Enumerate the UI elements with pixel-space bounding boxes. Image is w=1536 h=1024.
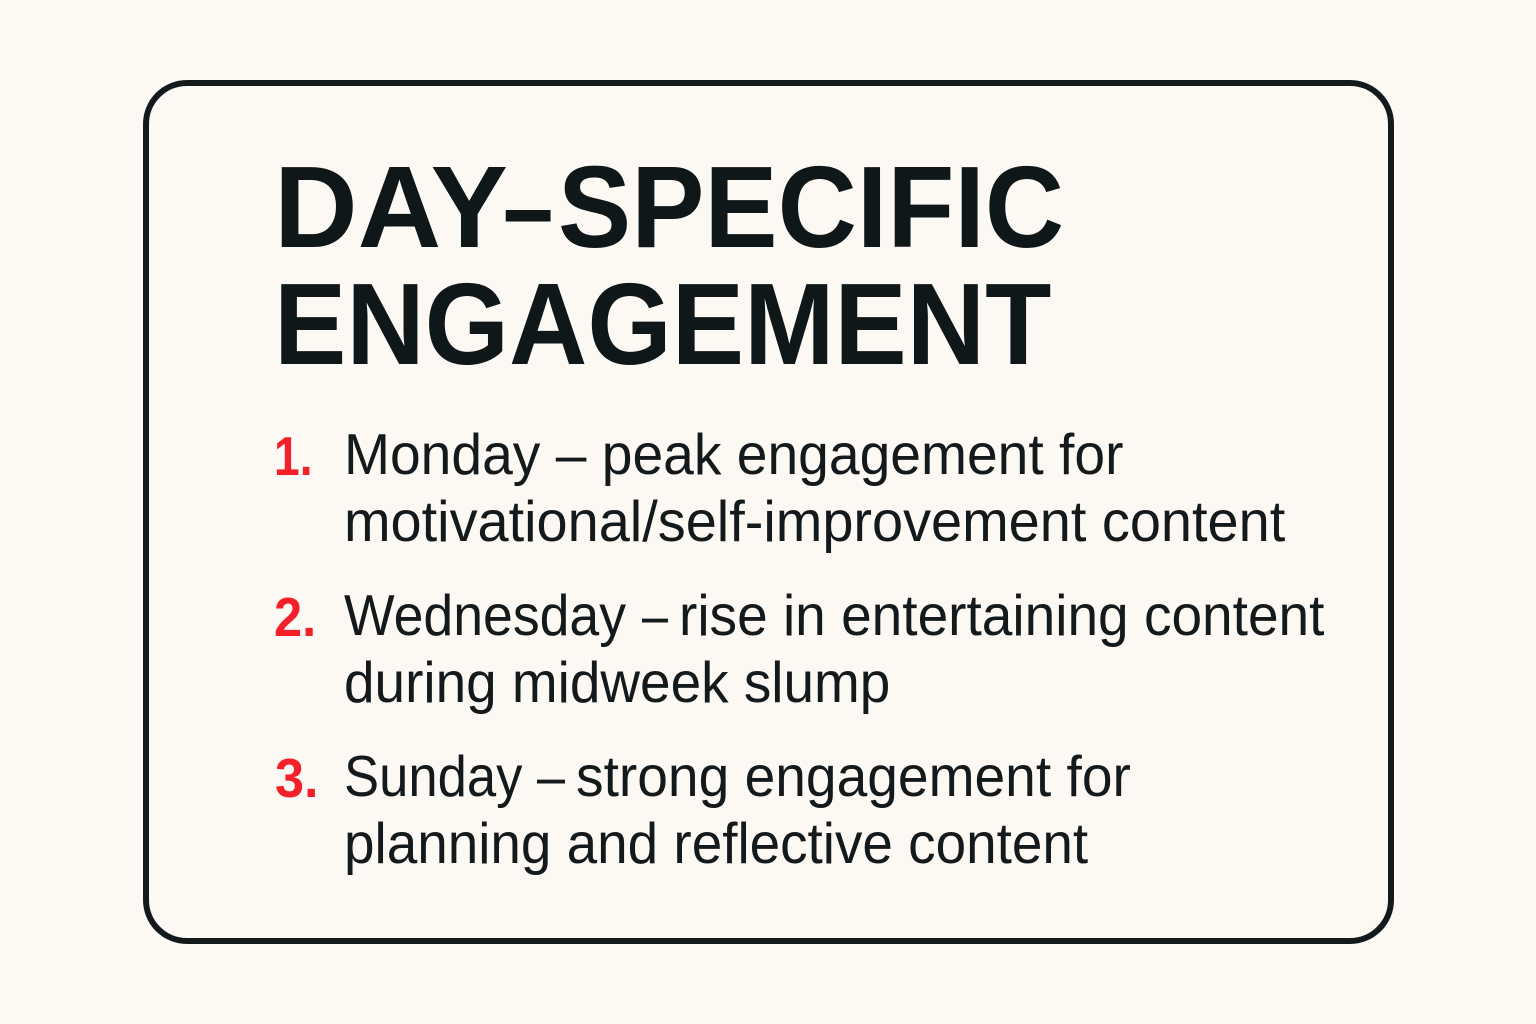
item 3 text — [344, 745, 1131, 876]
list item 3: Sunday — [275, 745, 1131, 876]
item 2 text: Wednesday — [344, 584, 626, 648]
title: ENGAGEMENT — [274, 259, 1051, 389]
number 2: 2. — [274, 586, 316, 648]
title — [274, 142, 1064, 389]
item 3 text: strong engagement for — [576, 745, 1131, 809]
item 2 text: rise in entertaining content — [679, 584, 1325, 648]
item 2 text — [344, 584, 1325, 715]
title: SPECIFIC — [558, 142, 1064, 272]
item 2 text: during midweek slump — [344, 651, 890, 715]
list item 2: Wednesday — [274, 584, 1325, 715]
item 3 text: Sunday — [344, 745, 522, 809]
panel: card — [143, 80, 1394, 944]
title: – — [503, 142, 553, 272]
list item 1: Monday — [274, 423, 1285, 554]
item 1 text — [344, 423, 1285, 554]
item 3 text: planning and reflective content — [344, 812, 1088, 876]
item 1 text: motivational/self-improvement content — [344, 490, 1285, 554]
number 1: 1. — [274, 425, 313, 487]
number 3: 3. — [275, 747, 319, 809]
item 2 text: – — [642, 584, 668, 648]
item 1 text: Monday – peak engagement for — [344, 423, 1123, 487]
title: DAY — [274, 142, 508, 272]
item 3 text: – — [537, 745, 565, 809]
